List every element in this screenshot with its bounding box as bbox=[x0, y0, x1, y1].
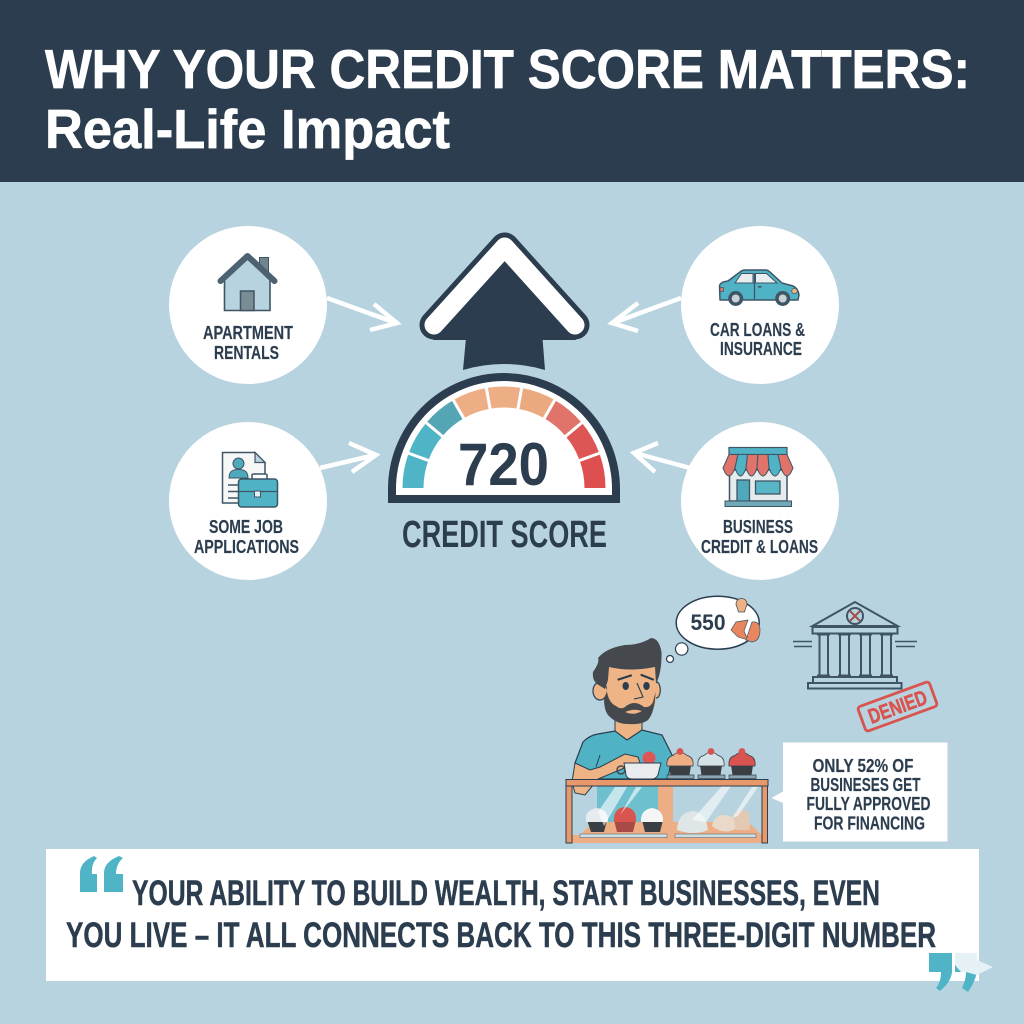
illustration: worried bakery owner bbox=[566, 596, 768, 843]
gauge colour segments bbox=[413, 397, 595, 488]
label: apartment rentals: RENTALS bbox=[214, 342, 279, 363]
callout: financing statistic: BUSINESES GET bbox=[810, 774, 921, 795]
label: some job applications: SOME JOB bbox=[209, 516, 283, 537]
panel: car loans and insurance bbox=[681, 226, 839, 384]
counter top cupcakes bbox=[667, 748, 756, 778]
label: some job applications bbox=[194, 516, 299, 557]
stamp: denied: DENIED bbox=[865, 686, 930, 729]
panel: quote bbox=[46, 849, 993, 992]
display case bbox=[566, 780, 768, 843]
label: car loans and insurance: INSURANCE bbox=[720, 338, 802, 359]
label: car loans and insurance bbox=[710, 319, 805, 359]
label: business credit and loans: CREDIT & LOANS bbox=[701, 536, 818, 557]
man: torso seen through glass bbox=[597, 785, 673, 823]
display case pastries bbox=[580, 807, 756, 838]
callout: financing statistic bbox=[772, 742, 948, 842]
panel: apartment rentals bbox=[169, 226, 327, 384]
icon: car bbox=[720, 270, 799, 306]
label: car loans and insurance: CAR LOANS & bbox=[710, 319, 805, 340]
icon: resume and briefcase bbox=[222, 452, 278, 507]
quote text bbox=[66, 874, 936, 955]
callout: financing statistic: FOR FINANCING bbox=[814, 812, 925, 834]
label: apartment rentals: APARTMENT bbox=[203, 322, 294, 343]
icon: opening quotation mark bbox=[80, 856, 123, 892]
label: apartment rentals bbox=[203, 322, 294, 363]
icon: bank building bbox=[793, 602, 917, 688]
coffee cup bbox=[617, 752, 661, 779]
man: neck bbox=[615, 715, 642, 741]
panel: job applications bbox=[169, 422, 327, 580]
man: shirt bbox=[575, 730, 672, 779]
arrow: business credit to score bbox=[634, 443, 690, 472]
man: arm bbox=[572, 754, 640, 795]
label: credit score: CREDIT SCORE bbox=[402, 514, 607, 556]
panel: business credit and loans bbox=[681, 422, 839, 580]
score number: 720 bbox=[458, 431, 549, 498]
arrow: job applications to score bbox=[320, 443, 376, 472]
callout: financing statistic: FULLY APPROVED bbox=[806, 793, 930, 814]
thought bubble: 550 bbox=[690, 610, 726, 635]
label: business credit and loans: BUSINESS bbox=[723, 516, 793, 537]
arrow: car loans to score bbox=[612, 298, 681, 331]
callout: financing statistic: ONLY 52% OF bbox=[812, 755, 914, 776]
header band bbox=[0, 0, 1024, 182]
man: head bbox=[593, 638, 662, 724]
arrow: apartment rentals to score bbox=[327, 298, 397, 330]
thought bubble bbox=[666, 596, 760, 662]
icon: closing quotation mark bbox=[929, 953, 993, 992]
glass reflections bbox=[598, 786, 758, 826]
icon: large upward arrow bbox=[433, 247, 576, 370]
icon: storefront bbox=[723, 448, 793, 506]
label: business credit and loans bbox=[701, 516, 818, 557]
icon: house bbox=[220, 256, 274, 310]
credit score gauge bbox=[392, 377, 616, 499]
title line two: Real-Life Impact bbox=[45, 98, 450, 160]
label: some job applications: APPLICATIONS bbox=[194, 536, 299, 557]
